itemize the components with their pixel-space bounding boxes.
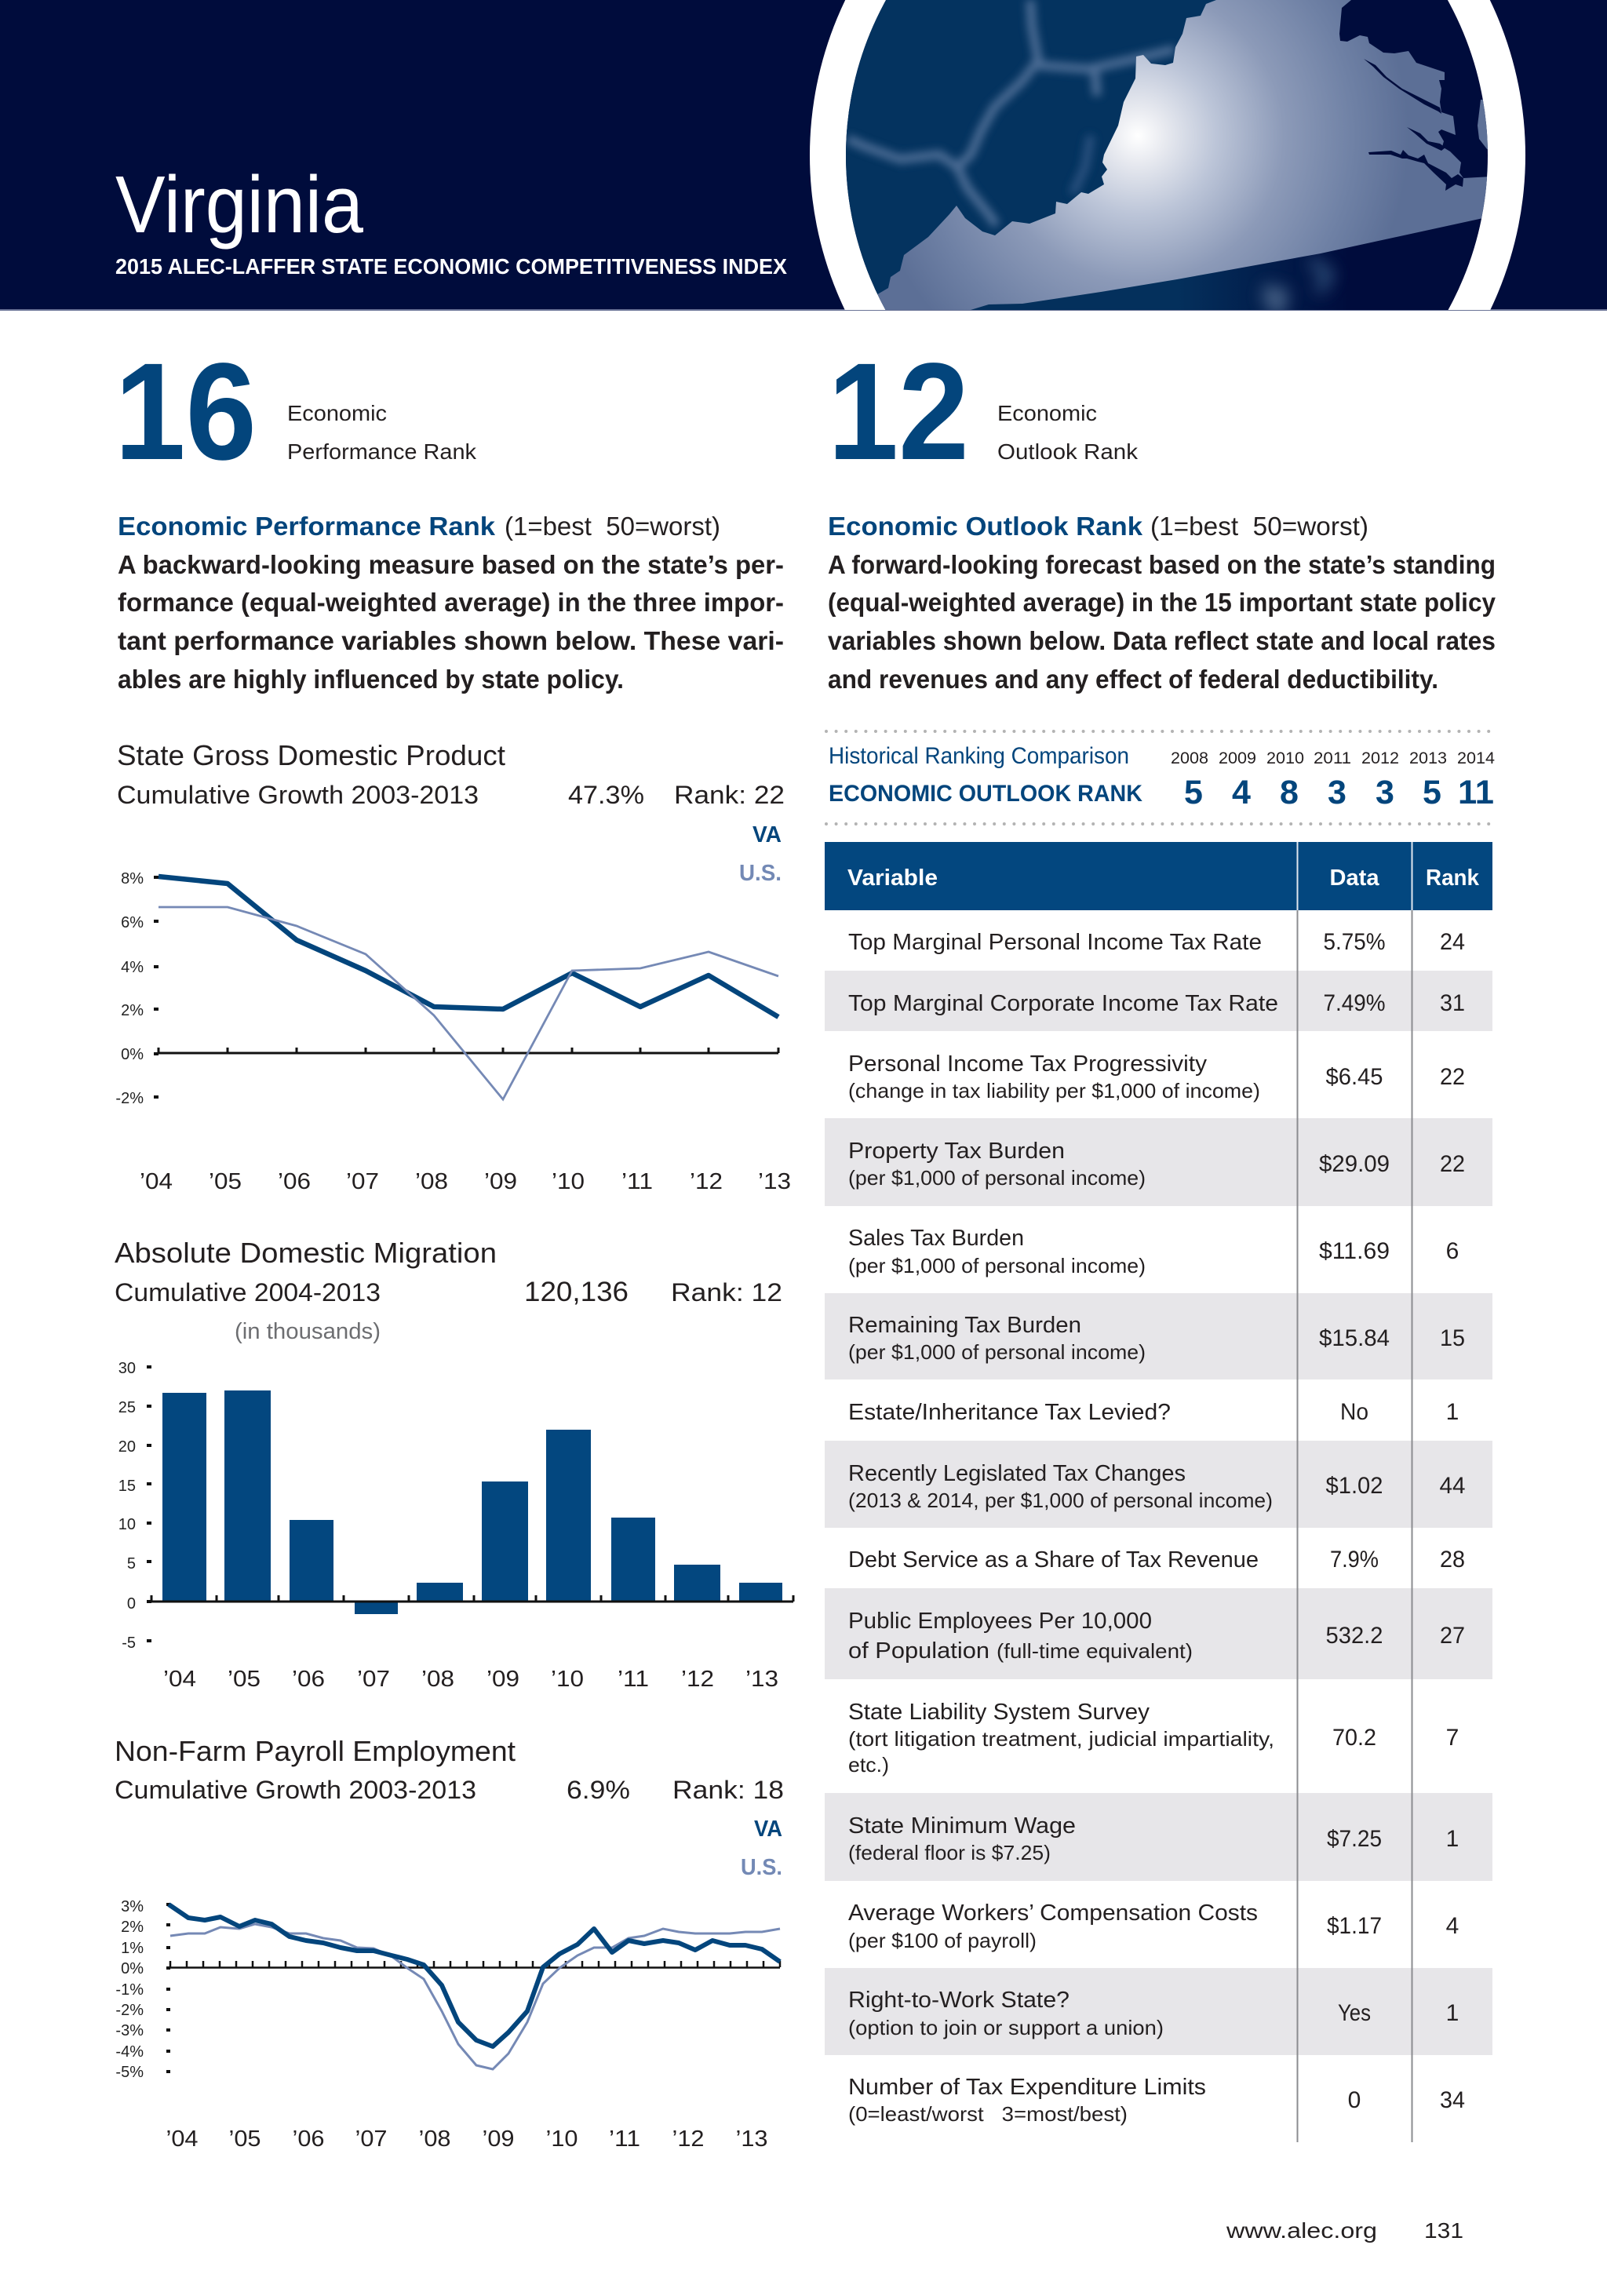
line chart: ’11 — [621, 1169, 653, 1194]
row: sales tax burden: 6 — [1446, 1238, 1459, 1264]
row: state liability system survey: (tort litigation treatment, judicial impartiality, — [848, 1727, 1274, 1751]
row: personal income tax progressivity — [848, 1051, 1465, 1102]
row: right-to-work: 1 — [1446, 2000, 1459, 2026]
footer — [1226, 2218, 1463, 2243]
row: state minimum wage: (federal floor is $7.25) — [848, 1841, 1051, 1864]
bar chart: ’10 — [551, 1667, 584, 1692]
description text: formance (equal-weighted average) in the three impor- — [118, 588, 784, 617]
row: property tax burden: $29.09 — [1319, 1151, 1390, 1177]
chart heading: Cumulative 2004-2013 — [115, 1278, 381, 1307]
row: public employees: 532.2 — [1326, 1623, 1383, 1649]
row: debt service: 28 — [1440, 1547, 1465, 1573]
line chart: ’07 — [346, 1169, 379, 1194]
row: right-to-work: Yes — [1338, 2000, 1371, 2026]
line chart: -2% — [115, 1090, 144, 1107]
line chart: ’04 — [140, 1169, 173, 1194]
row: sales tax burden: (per $1,000 of personal income) — [848, 1254, 1146, 1277]
legend — [739, 822, 782, 886]
line chart: ’05 — [229, 2127, 261, 2152]
line chart: ’13 — [736, 2127, 767, 2152]
panel: variables table — [825, 842, 1492, 2142]
bar chart: ’12 — [681, 1667, 714, 1692]
line chart: 8% — [121, 870, 144, 887]
row: tax expenditure limits — [848, 2075, 1465, 2126]
rank values row: 3 — [1328, 774, 1346, 811]
row: workers compensation: Average Workers’ Compensation Costs — [848, 1901, 1258, 1926]
chart heading: Rank: 22 — [674, 781, 785, 809]
rank caption: Economic — [997, 401, 1097, 425]
description text: A forward-looking forecast based on the state’s standing — [828, 550, 1496, 579]
section heading — [828, 512, 1368, 541]
description text: A backward-looking measure based on the state’s per- — [118, 550, 784, 579]
years row — [1171, 749, 1495, 767]
line chart: ’12 — [690, 1169, 723, 1194]
line chart: ’04 — [166, 2127, 198, 2152]
row: tax expenditure limits: 0 — [1348, 2087, 1361, 2113]
chart heading: State Gross Domestic Product — [117, 739, 505, 771]
legend — [741, 1817, 782, 1880]
legend: U.S. — [739, 861, 782, 886]
row: top marginal corporate income tax rate: 7.49% — [1323, 990, 1386, 1016]
bar chart — [118, 1360, 793, 1692]
line chart: ’11 — [609, 2127, 640, 2152]
bar chart: 20 — [118, 1438, 136, 1456]
bar chart: 0 — [127, 1595, 136, 1613]
row: personal income tax progressivity: $6.45 — [1326, 1064, 1383, 1090]
years row: 2014 — [1457, 749, 1495, 767]
line chart: 6% — [121, 914, 144, 931]
row: sales tax burden: Sales Tax Burden — [848, 1226, 1024, 1251]
table header: Variable — [847, 866, 938, 891]
table header — [825, 842, 1492, 910]
row: recently legislated tax changes: 44 — [1439, 1473, 1466, 1499]
line chart: 0% — [121, 1046, 144, 1063]
line chart: -1% — [115, 1981, 144, 1999]
row: top marginal corporate income tax rate: Top Marginal Corporate Income Tax Rate — [848, 991, 1278, 1016]
row: remaining tax burden — [848, 1313, 1465, 1364]
row: remaining tax burden: Remaining Tax Burden — [848, 1313, 1081, 1338]
bar chart: ’06 — [292, 1667, 325, 1692]
panel: historical ranking comparison — [826, 731, 1495, 824]
bar chart: 30 — [118, 1360, 136, 1377]
legend: U.S. — [741, 1855, 782, 1880]
row: personal income tax progressivity: (change in tax liability per $1,000 of income) — [848, 1079, 1260, 1102]
panel: non-farm payroll employment — [115, 1735, 784, 2152]
footer: 131 — [1424, 2218, 1463, 2243]
row: personal income tax progressivity: 22 — [1440, 1064, 1465, 1090]
line chart: ’09 — [482, 2127, 515, 2152]
row: state liability system survey: State Liability System Survey — [848, 1700, 1150, 1725]
line chart: ’12 — [672, 2127, 705, 2152]
subtitle: 2015 ALEC-LAFFER STATE ECONOMIC COMPETITIVENESS INDEX — [115, 254, 787, 279]
row: workers compensation: 4 — [1446, 1913, 1459, 1939]
chart heading: Cumulative Growth 2003-2013 — [117, 781, 479, 809]
table header: Data — [1329, 866, 1379, 891]
chart heading: Cumulative Growth 2003-2013 — [115, 1776, 476, 1804]
header banner — [0, 0, 1607, 311]
row: workers compensation: $1.17 — [1327, 1913, 1382, 1939]
bar chart: 25 — [118, 1399, 136, 1416]
bar chart: ’08 — [421, 1667, 454, 1692]
line chart: ’08 — [419, 2127, 450, 2152]
line chart: 2% — [121, 1002, 144, 1019]
line chart: ’13 — [758, 1169, 791, 1194]
legend: VA — [752, 822, 782, 847]
rank values row: 5 — [1423, 774, 1441, 811]
row: state liability system survey: 7 — [1446, 1725, 1459, 1751]
years row: 2011 — [1314, 749, 1351, 767]
row: tax expenditure limits: 34 — [1440, 2087, 1465, 2113]
chart heading — [117, 739, 785, 809]
years row: 2008 — [1171, 749, 1208, 767]
row: remaining tax burden: 15 — [1440, 1325, 1465, 1351]
legend: VA — [754, 1817, 782, 1842]
description text — [118, 550, 784, 694]
bar chart: ’05 — [228, 1667, 261, 1692]
line chart: ’10 — [552, 1169, 585, 1194]
row: state liability system survey: etc.) — [848, 1753, 889, 1777]
line chart: 3% — [121, 1898, 144, 1915]
panel: state gross domestic product — [115, 739, 791, 1194]
outlook rank label: ECONOMIC OUTLOOK RANK — [829, 781, 1142, 807]
rank caption: Economic — [287, 401, 387, 425]
section heading: (1=best 50=worst) — [1150, 512, 1368, 541]
row: right-to-work: Right-to-Work State? — [848, 1988, 1070, 2013]
line chart: ’05 — [209, 1169, 242, 1194]
rank values row: 11 — [1458, 774, 1494, 811]
row: recently legislated tax changes: $1.02 — [1326, 1473, 1383, 1499]
row: right-to-work: (option to join or support a union) — [848, 2016, 1164, 2039]
row: recently legislated tax changes — [848, 1461, 1466, 1512]
row: remaining tax burden: (per $1,000 of personal income) — [848, 1340, 1146, 1364]
rank caption — [287, 401, 477, 464]
row: recently legislated tax changes: (2013 & 2014, per $1,000 of personal income) — [848, 1489, 1273, 1512]
row: workers compensation: (per $100 of payroll) — [848, 1929, 1037, 1952]
years row: 2012 — [1361, 749, 1399, 767]
bar chart: 10 — [118, 1516, 136, 1533]
line chart: 2% — [121, 1919, 144, 1936]
rank caption — [997, 401, 1139, 464]
row: public employees — [848, 1609, 1465, 1664]
row: property tax burden: (per $1,000 of personal income) — [848, 1166, 1146, 1190]
row: public employees: (full-time equivalent) — [997, 1639, 1193, 1663]
row: state minimum wage: $7.25 — [1327, 1826, 1382, 1852]
chart heading: Rank: 18 — [672, 1776, 784, 1804]
map of Virginia in circle — [810, 0, 1525, 310]
historical heading: Historical Ranking Comparison — [829, 743, 1129, 769]
line chart: ’06 — [278, 1169, 311, 1194]
row: state liability system survey: 70.2 — [1332, 1725, 1376, 1751]
row: estate inheritance tax — [848, 1399, 1459, 1425]
row: public employees: 27 — [1440, 1623, 1465, 1649]
section heading: (1=best 50=worst) — [505, 512, 720, 541]
chart heading: 120,136 — [524, 1277, 629, 1307]
section heading: Economic Outlook Rank — [828, 512, 1143, 541]
row: tax expenditure limits: (0=least/worst 3=most/best) — [848, 2102, 1128, 2126]
bar chart: ’11 — [618, 1667, 649, 1692]
description text: (equal-weighted average) in the 15 important state policy — [828, 588, 1496, 617]
panel: economic performance rank — [115, 335, 784, 694]
description text: variables shown below. Data reflect state and local rates — [828, 626, 1496, 655]
bar chart: 15 — [118, 1478, 136, 1495]
bar chart: ’09 — [486, 1667, 519, 1692]
row: tax expenditure limits: Number of Tax Expenditure Limits — [848, 2075, 1206, 2100]
row: remaining tax burden: $15.84 — [1319, 1325, 1390, 1351]
line chart: ’09 — [484, 1169, 517, 1194]
bar chart: ’13 — [745, 1667, 778, 1692]
line chart: 1% — [121, 1940, 144, 1957]
row: public employees: of Population — [848, 1638, 989, 1664]
row: top marginal personal income tax rate: 24 — [1440, 929, 1465, 955]
rank values row: 4 — [1232, 774, 1251, 811]
bar chart: -5 — [122, 1635, 136, 1652]
line chart: -2% — [115, 2002, 144, 2019]
rank values row: 3 — [1376, 774, 1394, 811]
line chart: 0% — [121, 1960, 144, 1977]
row: top marginal personal income tax rate — [848, 929, 1465, 955]
row: sales tax burden — [848, 1226, 1459, 1277]
row: state minimum wage: 1 — [1446, 1826, 1459, 1852]
row: sales tax burden: $11.69 — [1319, 1238, 1390, 1264]
row: recently legislated tax changes: Recently Legislated Tax Changes — [848, 1461, 1186, 1486]
row: top marginal corporate income tax rate: 31 — [1440, 990, 1465, 1016]
rank values row: 5 — [1184, 774, 1203, 811]
line chart: ’06 — [292, 2127, 325, 2152]
line chart — [115, 1898, 780, 2152]
chart heading: 47.3% — [568, 781, 644, 809]
title: Virginia — [115, 159, 364, 250]
row: property tax burden — [848, 1139, 1465, 1190]
chart heading: 6.9% — [567, 1776, 630, 1804]
row: top marginal personal income tax rate: Top Marginal Personal Income Tax Rate — [848, 930, 1262, 955]
big rank number 16: 16 — [115, 335, 257, 489]
section heading: Economic Performance Rank — [118, 512, 496, 541]
panel: absolute domestic migration — [115, 1237, 793, 1692]
chart heading: Rank: 12 — [671, 1278, 782, 1307]
row: property tax burden: Property Tax Burden — [848, 1139, 1065, 1164]
description text: tant performance variables shown below. These vari- — [118, 626, 784, 655]
rivers — [1364, 59, 1463, 191]
years row: 2010 — [1266, 749, 1304, 767]
row: property tax burden: 22 — [1440, 1151, 1465, 1177]
row: public employees: Public Employees Per 10,000 — [848, 1609, 1152, 1634]
description text: and revenues and any effect of federal deductibility. — [828, 665, 1438, 694]
bar chart: ’07 — [357, 1667, 390, 1692]
line chart: 4% — [121, 959, 144, 976]
row: debt service: Debt Service as a Share of Tax Revenue — [848, 1547, 1259, 1573]
description text — [828, 550, 1496, 694]
bar chart: 5 — [127, 1555, 136, 1573]
line chart: ’07 — [355, 2127, 388, 2152]
row: estate inheritance tax: No — [1340, 1399, 1368, 1425]
years row: 2013 — [1409, 749, 1447, 767]
row: workers compensation — [848, 1901, 1459, 1952]
bar chart: ’04 — [163, 1667, 196, 1692]
chart heading: Non-Farm Payroll Employment — [115, 1735, 516, 1767]
chart heading: Absolute Domestic Migration — [115, 1237, 497, 1269]
row: personal income tax progressivity: Personal Income Tax Progressivity — [848, 1051, 1208, 1077]
rank values row — [1184, 774, 1494, 811]
line chart — [115, 870, 791, 1194]
row: debt service: 7.9% — [1330, 1547, 1379, 1573]
rank caption: Outlook Rank — [997, 439, 1139, 464]
row: top marginal personal income tax rate: 5.75% — [1323, 929, 1386, 955]
line chart: -3% — [115, 2022, 144, 2039]
chart heading — [115, 1735, 784, 1804]
chart heading — [115, 1237, 782, 1344]
row: state minimum wage: State Minimum Wage — [848, 1813, 1076, 1839]
line chart: ’08 — [415, 1169, 448, 1194]
years row: 2009 — [1219, 749, 1256, 767]
table header: Rank — [1426, 866, 1480, 891]
row: debt service — [848, 1547, 1465, 1573]
row: estate inheritance tax: Estate/Inheritance Tax Levied? — [848, 1400, 1171, 1425]
row: estate inheritance tax: 1 — [1446, 1399, 1459, 1425]
rank caption: Performance Rank — [287, 439, 477, 464]
line chart: -4% — [115, 2043, 144, 2061]
description text: ables are highly influenced by state policy. — [118, 665, 624, 694]
chart heading: (in thousands) — [235, 1319, 381, 1344]
rank values row: 8 — [1280, 774, 1299, 811]
section heading — [118, 512, 720, 541]
big rank number 12: 12 — [828, 335, 969, 489]
line chart: -5% — [115, 2064, 144, 2081]
row: state minimum wage — [848, 1813, 1459, 1864]
row: right-to-work — [848, 1988, 1459, 2039]
row: state liability system survey — [848, 1700, 1459, 1777]
row: top marginal corporate income tax rate — [848, 990, 1465, 1016]
footer: www.alec.org — [1226, 2218, 1377, 2243]
panel: economic outlook rank — [828, 335, 1496, 694]
line chart: ’10 — [546, 2127, 578, 2152]
